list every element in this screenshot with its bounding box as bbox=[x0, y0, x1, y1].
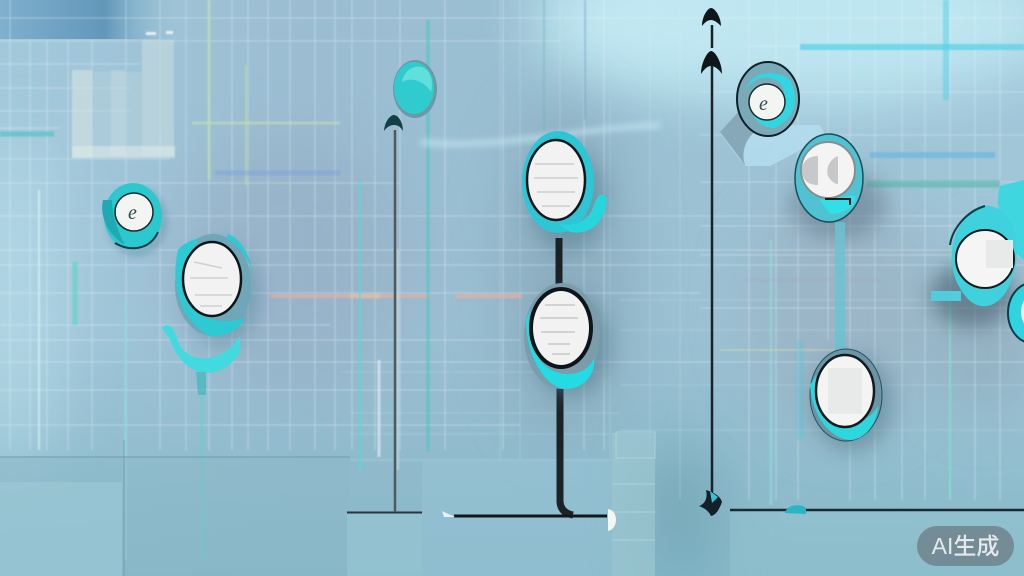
flag shape behind top-right node bbox=[720, 105, 825, 166]
callout: right node with columns bbox=[790, 134, 886, 239]
stem, right nodes bbox=[835, 222, 845, 357]
faint bar chart, top left bbox=[72, 31, 175, 158]
callout: large node with cradle, left bbox=[162, 234, 258, 395]
bottom panels bbox=[0, 432, 1024, 576]
callout: small node, left: e bbox=[128, 202, 137, 224]
AI generated badge bbox=[917, 526, 1014, 566]
baseline axis, centre bbox=[442, 509, 616, 531]
callout: small node, left bbox=[102, 183, 168, 257]
flag shadow bbox=[720, 108, 758, 165]
dark up-arrow axis, right bbox=[699, 8, 722, 516]
baseline axis, right bbox=[730, 505, 1024, 514]
stem between centre nodes bbox=[556, 238, 562, 285]
callout: lower centre node bbox=[524, 283, 610, 395]
stem to baseline, centre bbox=[560, 388, 573, 515]
callout: far right node bbox=[930, 180, 1024, 327]
callout: lower right node bbox=[810, 349, 892, 451]
AI generated badge: AI生成 bbox=[932, 533, 999, 559]
callout: top right small node: e bbox=[759, 93, 768, 115]
baseline axis, left-centre bbox=[347, 512, 422, 514]
teal node, top centre bbox=[393, 60, 437, 118]
top-left dark band bbox=[0, 0, 175, 39]
callout: top right small node bbox=[737, 62, 799, 136]
callout: clipped node at right edge bbox=[1008, 283, 1024, 343]
callout: upper centre node bbox=[522, 131, 607, 250]
vertical stem with small arrowhead, centre-left bbox=[384, 115, 403, 512]
dim horizontal grid lines lower centre bbox=[340, 0, 1024, 500]
